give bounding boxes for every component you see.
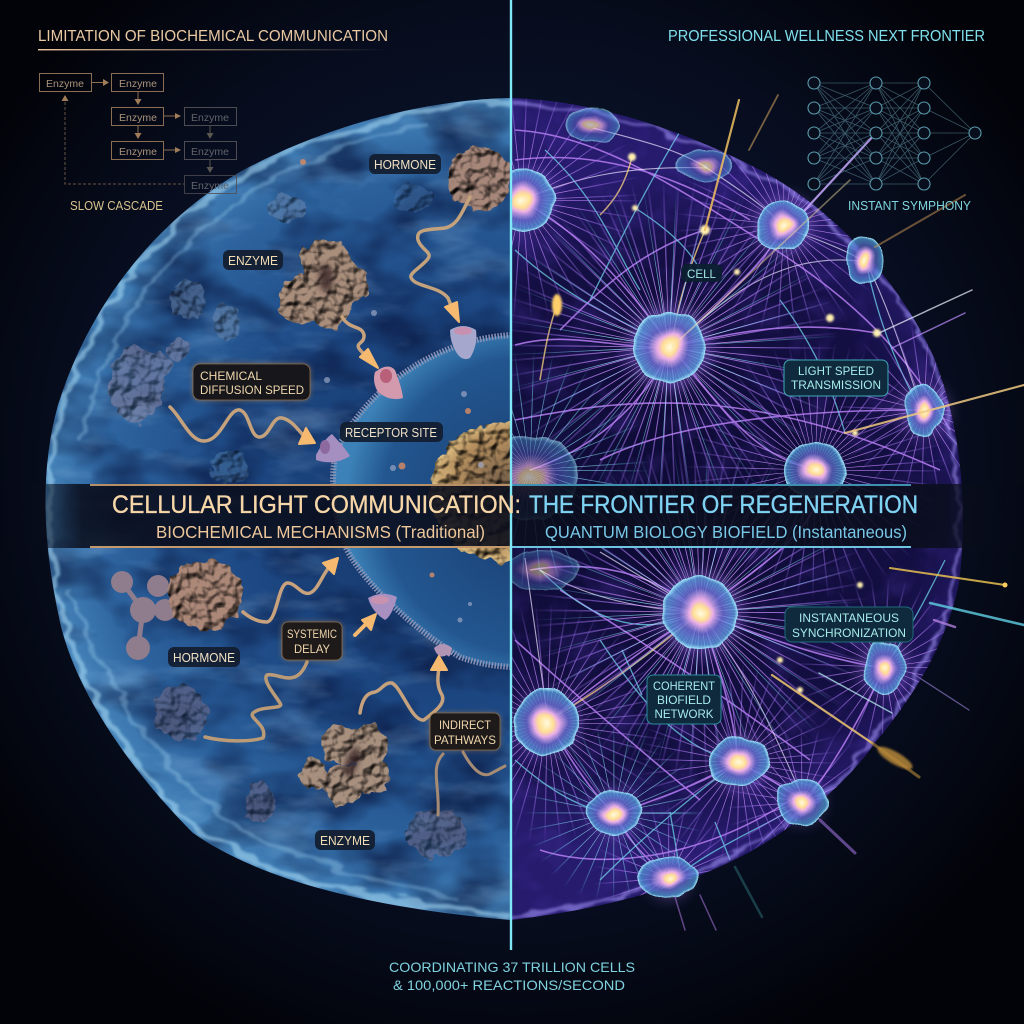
label: indirect pathways: PATHWAYS: [434, 733, 496, 747]
caption: instant symphony: INSTANT SYMPHONY: [848, 199, 972, 213]
caption: slow cascade: SLOW CASCADE: [70, 199, 163, 213]
light beams: [672, 95, 1024, 930]
subtitle text: QUANTUM BIOLOGY BIOFIELD (Instantaneous): [545, 522, 907, 542]
molecule: hormone lower: [111, 559, 241, 660]
title text: CELLULAR LIGHT COMMUNICATION:: [112, 491, 521, 519]
ray bursts: [462, 140, 969, 916]
flow diagram: slow cascade: Enzyme: [46, 78, 84, 90]
footer caption: [389, 959, 635, 993]
label: coherent biofield network: NETWORK: [654, 707, 714, 721]
molecule: hormone upper: [448, 146, 512, 210]
label: cell: [681, 264, 722, 282]
label: enzyme lower: [315, 830, 375, 850]
label: enzyme lower: ENZYME: [320, 834, 370, 848]
cells: [482, 107, 948, 898]
heading: left section title: LIMITATION OF BIOCHEMICAL COMMUNICATION: [38, 28, 388, 45]
sparkles: [552, 153, 915, 773]
nucleus: [330, 332, 510, 670]
label: coherent biofield network: COHERENT: [653, 679, 716, 693]
small vesicles: [324, 310, 484, 622]
label: coherent biofield network: [647, 675, 721, 724]
network lines: [515, 100, 950, 900]
label: hormone lower: [168, 647, 240, 667]
label: hormone lower: HORMONE: [173, 651, 235, 665]
label: instantaneous synchronization: INSTANTANEOUS: [799, 611, 899, 625]
label: chemical diffusion speed: DIFFUSION SPEED: [200, 383, 304, 397]
label: systemic delay: SYSTEMIC: [287, 627, 337, 641]
label: light speed transmission: LIGHT SPEED: [798, 364, 874, 378]
molecule: enzyme lower: [300, 725, 390, 805]
flow diagram: slow cascade: Enzyme: [191, 146, 229, 158]
flow diagram: slow cascade: [40, 74, 236, 194]
label: cell: CELL: [687, 269, 717, 281]
label: instantaneous synchronization: [785, 607, 913, 642]
central divider line: [508, 0, 514, 950]
flow diagram: slow cascade: Enzyme: [191, 180, 229, 192]
receptors: [316, 326, 476, 656]
arrow: systemic delay pathway: [205, 614, 376, 741]
flow diagram: slow cascade: Enzyme: [119, 146, 157, 158]
label: enzyme upper: ENZYME: [228, 254, 278, 268]
label: light speed transmission: [784, 360, 888, 396]
molecule: enzyme upper: [279, 238, 368, 328]
label: systemic delay: DELAY: [294, 642, 330, 656]
faded organelles: [109, 185, 467, 857]
subtitle text: BIOCHEMICAL MECHANISMS (Traditional): [156, 522, 485, 542]
network diagram: instant symphony: [808, 77, 981, 190]
title text: [112, 491, 918, 519]
label: receptor site: [340, 422, 443, 442]
label: systemic delay: [282, 622, 342, 660]
globe rim glow: [511, 101, 959, 917]
arrow: indirect pathways: [360, 656, 505, 815]
label: hormone upper: HORMONE: [374, 158, 436, 172]
panel: biochemical half of the cell: [40, 90, 570, 925]
subtitle text: [156, 522, 907, 542]
label: instantaneous synchronization: SYNCHRONIZATION: [792, 626, 906, 640]
arrow: enzyme to receptor: [342, 317, 378, 368]
label: hormone upper: [369, 154, 441, 174]
arrow: hormone to receptor: [411, 197, 470, 322]
label: chemical diffusion speed: CHEMICAL: [200, 369, 262, 383]
label: light speed transmission: TRANSMISSION: [791, 378, 881, 392]
label: indirect pathways: [430, 713, 500, 750]
flow diagram: slow cascade: Enzyme: [119, 78, 157, 90]
label: receptor site: RECEPTOR SITE: [345, 426, 437, 440]
footer caption: COORDINATING 37 TRILLION CELLS: [389, 959, 635, 975]
label: coherent biofield network: BIOFIELD: [657, 693, 711, 707]
label: chemical diffusion speed: [193, 364, 310, 400]
title text: THE FRONTIER OF REGENERATION: [529, 491, 918, 519]
label: enzyme upper: [223, 250, 283, 270]
title banner: [0, 484, 1024, 548]
footer caption: & 100,000+ REACTIONS/SECOND: [393, 977, 625, 993]
flow diagram: slow cascade: Enzyme: [119, 112, 157, 124]
flow diagram: slow cascade: Enzyme: [191, 112, 229, 124]
label: indirect pathways: INDIRECT: [439, 718, 492, 732]
arrow: lower hormone pathway: [243, 558, 338, 622]
heading: right section title: PROFESSIONAL WELLNESS NEXT FRONTIER: [668, 28, 985, 45]
arrow: diffusion to receptor: [170, 407, 315, 444]
